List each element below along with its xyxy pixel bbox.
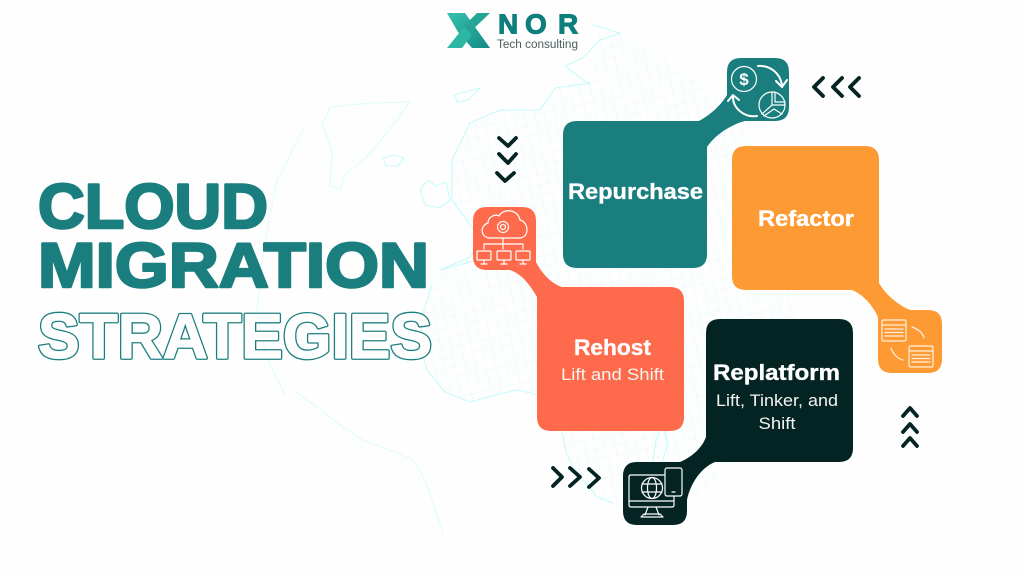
- icon: money cycle: [728, 66, 787, 118]
- card shape with icon tile: [563, 58, 789, 268]
- panel: repurchase: [563, 58, 789, 268]
- heading: refactor: Refactor: [758, 206, 854, 231]
- logo wordmark: N: [498, 8, 518, 40]
- logo tagline: Tech consulting: [497, 39, 578, 51]
- title: [38, 172, 432, 372]
- panel: replatform: [623, 319, 853, 525]
- logo mark: X: [447, 13, 490, 48]
- logo: [447, 8, 578, 51]
- icon: code windows: [882, 320, 933, 367]
- logo wordmark: R: [558, 8, 578, 40]
- logo wordmark: O: [525, 8, 547, 40]
- icon: devices with globe: [629, 468, 682, 517]
- arrows: pointing right: [553, 468, 599, 487]
- panel: rehost: [473, 207, 684, 431]
- card shape with icon tile: [732, 146, 942, 373]
- heading: replatform: Replatform: [713, 360, 840, 385]
- coastlines: [257, 25, 668, 533]
- card shape with icon tile: [473, 207, 684, 431]
- heading: rehost: Rehost: [574, 335, 652, 360]
- background globe map: [253, 25, 830, 533]
- subheading: lift, tinker, and shift: [716, 392, 838, 433]
- panel: refactor: [732, 146, 942, 373]
- subheading: lift and shift: Lift and Shift: [561, 366, 664, 384]
- subheading: lift, tinker, and shift: Shift: [758, 415, 796, 433]
- heading: repurchase: Repurchase: [568, 179, 703, 204]
- arrows: pointing left: [814, 78, 859, 96]
- card shape with icon tile: [623, 319, 853, 525]
- subheading: lift, tinker, and shift: Lift, Tinker, and: [716, 392, 838, 410]
- title line: strategies outlined: STRATEGIES: [38, 302, 432, 372]
- arrows: pointing up: [903, 408, 917, 446]
- title line: cloud: CLOUD: [38, 172, 268, 242]
- icon: money cycle: $: [739, 70, 749, 89]
- title line: migration: MIGRATION: [38, 231, 429, 301]
- title line: strategies outlined: STRATEGIES: [38, 302, 432, 372]
- arrows: pointing down: [497, 138, 516, 181]
- icon: cloud network: [477, 211, 530, 264]
